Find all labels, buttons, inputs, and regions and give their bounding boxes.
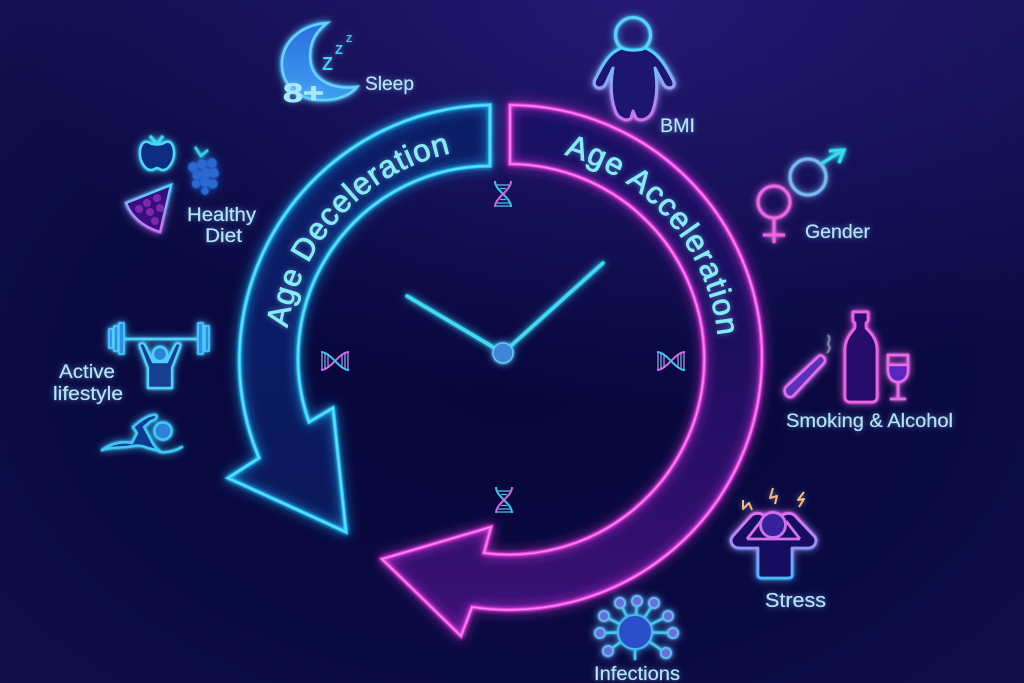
- icon: dna right: [657, 352, 685, 370]
- icon: body figure: [594, 18, 674, 120]
- icon: dna left: [321, 352, 349, 370]
- icon: apple: [140, 136, 174, 170]
- group: bmi: [594, 18, 695, 137]
- icon: weightlifter: [109, 323, 209, 388]
- icon: cigarette: [785, 335, 830, 397]
- label: Active lifestyle: Active: [59, 362, 115, 383]
- label: Gender: Gender: [805, 222, 871, 243]
- icon: fruit slice: [126, 185, 171, 232]
- icon: sleep z letters: Z: [335, 42, 343, 57]
- icon: dna top: [495, 181, 511, 207]
- label: Active lifestyle: lifestyle: [53, 384, 123, 405]
- label: Sleep: Sleep: [365, 74, 414, 95]
- label: Healthy Diet: Diet: [205, 226, 243, 247]
- group: gender: [758, 150, 871, 243]
- label: BMI: BMI: [660, 116, 695, 137]
- group: infections: [594, 596, 680, 683]
- icon: grapes: [188, 147, 219, 195]
- group: smoking and alcohol: [785, 312, 953, 432]
- group: healthy diet: [126, 136, 257, 247]
- label: Smoking & Alcohol: Smoking & Alcohol: [786, 411, 953, 432]
- icon: female symbol: [758, 186, 790, 243]
- arrow: age deceleration: [220, 94, 501, 541]
- label: Stress: Stress: [765, 590, 826, 612]
- icon: dna bottom: [496, 487, 512, 513]
- icon: sleep z letters: [322, 34, 352, 74]
- label: Age Acceleration: Age Acceleration: [562, 134, 737, 338]
- icon: sleep z letters: Z: [346, 34, 352, 45]
- group: active lifestyle: [53, 323, 209, 452]
- icon: virus: [595, 596, 678, 660]
- icon: male symbol: [790, 150, 844, 195]
- icon: moon: [282, 23, 357, 100]
- clock hands and hub: [407, 263, 603, 363]
- label: Active lifestyle: [53, 362, 123, 405]
- icon: sleep z letters: Z: [322, 54, 333, 74]
- label: Age Deceleration: Age Deceleration: [265, 135, 452, 330]
- arrow: age acceleration: [373, 94, 774, 645]
- icon: lightning bolts: [743, 488, 804, 510]
- group: sleep: [282, 23, 414, 108]
- icon: swimmer: [102, 415, 182, 452]
- icon: stressed person: [731, 512, 816, 578]
- label: Healthy Diet: [187, 205, 257, 247]
- icon: bottle: [845, 312, 877, 402]
- icon: wine glass: [888, 355, 908, 399]
- group: stress: [731, 488, 826, 612]
- label: Healthy Diet: Healthy: [187, 205, 257, 226]
- text: 8+: 8+: [283, 78, 324, 108]
